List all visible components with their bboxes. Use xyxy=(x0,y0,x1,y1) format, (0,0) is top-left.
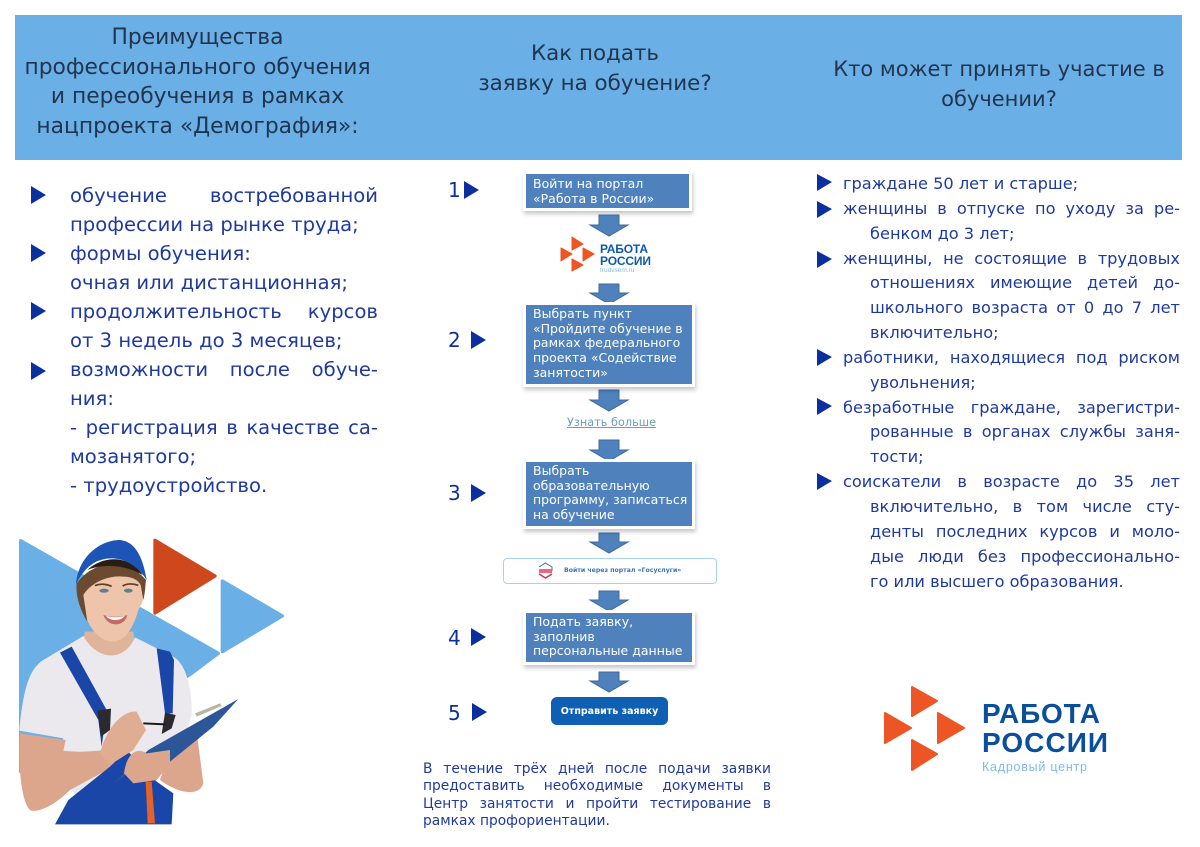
flow step 2 box xyxy=(526,305,692,384)
text block: advantages list: ния: xyxy=(70,387,114,410)
text block: participants list: го или высшего образования. xyxy=(870,572,1124,590)
flow step 1 box xyxy=(526,174,689,208)
flow step 1 box: «Работа в России» xyxy=(533,191,654,206)
text block: advantages list: возможности после обуче- xyxy=(70,358,378,381)
text block: participants list: женщины в отпуске по уходу за ре- xyxy=(843,199,1180,218)
text block: participants list: соискатели в возрасте до 35 лет xyxy=(843,472,1180,491)
text block: participants list: включительно, в том числе сту- xyxy=(870,497,1180,516)
logo: Работа России Кадровый центр: РОССИИ xyxy=(982,727,1108,758)
heading: how to apply xyxy=(478,41,712,96)
text block: advantages list: формы обучения: xyxy=(70,242,251,265)
text block: advantages list: мозанятого; xyxy=(70,445,196,468)
text block: note about documents xyxy=(423,761,771,829)
text block: note about documents: предоставить необходимые документы в xyxy=(423,778,771,794)
step number 4: 4 xyxy=(448,626,461,650)
heading: advantages: и переобучения в рамках xyxy=(51,84,344,109)
text block: participants list: женщины, не состоящие в трудовых xyxy=(843,249,1180,268)
text block: advantages list: - трудоустройство. xyxy=(70,474,267,497)
flow step 2 box: проекта «Содействие xyxy=(533,350,677,365)
heading: advantages xyxy=(24,25,371,139)
flow step 2 box: занятости» xyxy=(533,365,608,380)
flow step 3 box xyxy=(526,462,692,526)
text block: participants list: безработные граждане, зарегистри- xyxy=(843,398,1180,417)
flow step 3 box: образовательную xyxy=(533,478,650,493)
heading: how to apply: Как подать xyxy=(531,41,659,66)
text block: participants list: включительно; xyxy=(870,323,999,342)
text block: note about documents: рамках профориентации. xyxy=(423,813,610,829)
text block: advantages list: очная или дистанционная; xyxy=(70,271,348,294)
bullet icons: left column xyxy=(31,186,46,380)
flow step 2 box: «Пройдите обучение в xyxy=(533,321,683,336)
flow step 4 box: Подать заявку, xyxy=(533,614,633,629)
text block: participants list: бенком до 3 лет; xyxy=(870,224,1014,243)
step marker arrows xyxy=(464,181,487,721)
submit button: Отправить заявку xyxy=(561,706,658,717)
header band xyxy=(15,15,1182,160)
text block: participants list: дые люди без профессионально- xyxy=(870,547,1180,566)
button label: Войти через портал «Госуслуги» xyxy=(564,567,681,574)
heading: advantages: профессионального обучения xyxy=(24,55,371,80)
logo: Работа России Кадровый центр: Кадровый центр xyxy=(982,760,1087,774)
heading: advantages: Преимущества xyxy=(112,25,283,50)
text block: participants list: денты последних курсов и моло- xyxy=(870,522,1180,541)
step number 3: 3 xyxy=(448,481,461,505)
heading: who can participate: обучении? xyxy=(941,87,1057,111)
text block: participants list: школьного возраста от 0 до 7 лет xyxy=(870,298,1180,317)
logo: Работа России Кадровый центр: РАБОТА xyxy=(982,698,1100,729)
flow step 1 box: Войти на портал xyxy=(533,176,643,191)
text block: note about documents: В течение трёх дней после подачи заявки xyxy=(423,761,771,777)
text block: advantages list xyxy=(70,184,378,497)
flow step 3 box: Выбрать xyxy=(533,463,589,478)
flow step 3 box: на обучение xyxy=(533,507,615,522)
flow arrows xyxy=(588,214,630,693)
small logo: Работа России xyxy=(560,236,651,274)
small logo: Работа России: РАБОТА xyxy=(600,242,648,256)
text block: participants list: граждане 50 лет и старше; xyxy=(843,174,1078,193)
flow step 4 box: персональные данные xyxy=(533,643,682,658)
small logo: Работа России: РОССИИ xyxy=(600,254,651,268)
text block: note about documents: Центр занятости и пройти тестирование в xyxy=(423,796,771,812)
heading: who can participate: Кто может принять участие в xyxy=(833,57,1165,81)
text block: advantages list: продолжительность курсов xyxy=(70,300,378,323)
text block: advantages list: профессии на рынке труда; xyxy=(70,213,359,236)
small logo: Работа России: trudvsem.ru xyxy=(600,267,635,274)
heading: how to apply: заявку на обучение? xyxy=(478,71,712,96)
text block: participants list: увольнения; xyxy=(870,373,976,392)
text block: participants list: тости; xyxy=(870,447,924,466)
text block: advantages list: от 3 недель до 3 месяцев; xyxy=(70,329,342,352)
step number 2: 2 xyxy=(448,328,461,352)
text block: advantages list: обучение востребованной xyxy=(70,184,378,207)
heading: who can participate xyxy=(833,57,1165,111)
flow step 2 box: Выбрать пункт xyxy=(533,306,632,321)
heading: advantages: нацпроекта «Демография»: xyxy=(36,114,359,139)
text block: participants list xyxy=(843,174,1180,590)
link: learn more: Узнать больше xyxy=(567,416,656,429)
flow step 3 box: программу, записаться xyxy=(533,492,687,507)
flow step 2 box: рамках федерального xyxy=(533,335,680,350)
text block: participants list: отношениях имеющие детей до- xyxy=(870,273,1180,292)
submit button xyxy=(551,697,668,725)
step number 5: 5 xyxy=(448,701,461,725)
step number 1: 1 xyxy=(448,178,461,202)
bullet icons: right column xyxy=(817,174,832,490)
text block: participants list: работники, находящиеся под риском xyxy=(843,348,1180,367)
text block: participants list: рованные в органах службы заня- xyxy=(870,422,1180,441)
flow step 4 box: заполнив xyxy=(533,629,595,644)
Gosuslugi login button xyxy=(503,558,717,584)
illustration: worker with clipboard xyxy=(19,538,284,824)
logo: Работа России Кадровый центр xyxy=(884,686,1108,774)
icon: Gosuslugi emblem xyxy=(538,562,552,579)
text block: advantages list: - регистрация в качестве са- xyxy=(70,416,378,439)
flow step 4 box xyxy=(526,613,692,662)
